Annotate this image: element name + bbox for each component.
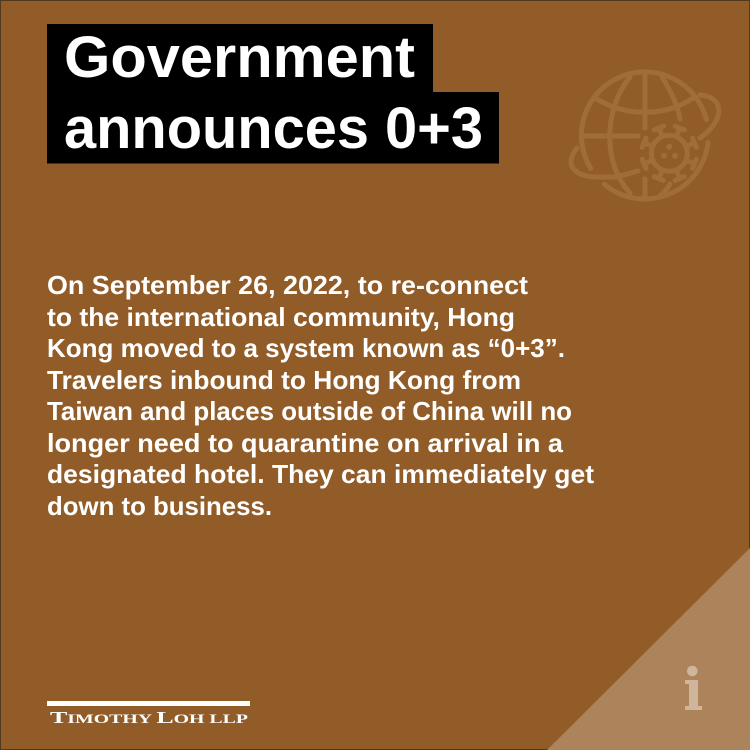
- logo: Timothy Loh LLP: [47, 701, 250, 727]
- icon: virus: [642, 126, 696, 180]
- title: announces 0+3: [64, 96, 483, 161]
- text block: body: longer need to quarantine on arrival in a: [47, 428, 564, 458]
- title: [47, 24, 499, 164]
- text block: body: designated hotel. They can immediately get: [47, 459, 594, 489]
- text block: body: [47, 270, 594, 521]
- logo: Timothy Loh LLP: T IMOTHY L OH LLP: [50, 708, 248, 727]
- text block: body: Travelers inbound to Hong Kong from: [47, 365, 521, 395]
- icon: globe with virus: [571, 72, 719, 199]
- icon: info: [685, 666, 702, 710]
- text block: body: Kong moved to a system known as “0+3”.: [47, 333, 565, 363]
- text block: body: Taiwan and places outside of China will no: [47, 396, 572, 426]
- text block: body: to the international community, Hong: [47, 302, 515, 332]
- text block: body: down to business.: [47, 491, 272, 521]
- title: Government: [64, 25, 415, 90]
- corner triangle: [547, 548, 750, 750]
- text block: body: On September 26, 2022, to re-connect: [47, 270, 528, 300]
